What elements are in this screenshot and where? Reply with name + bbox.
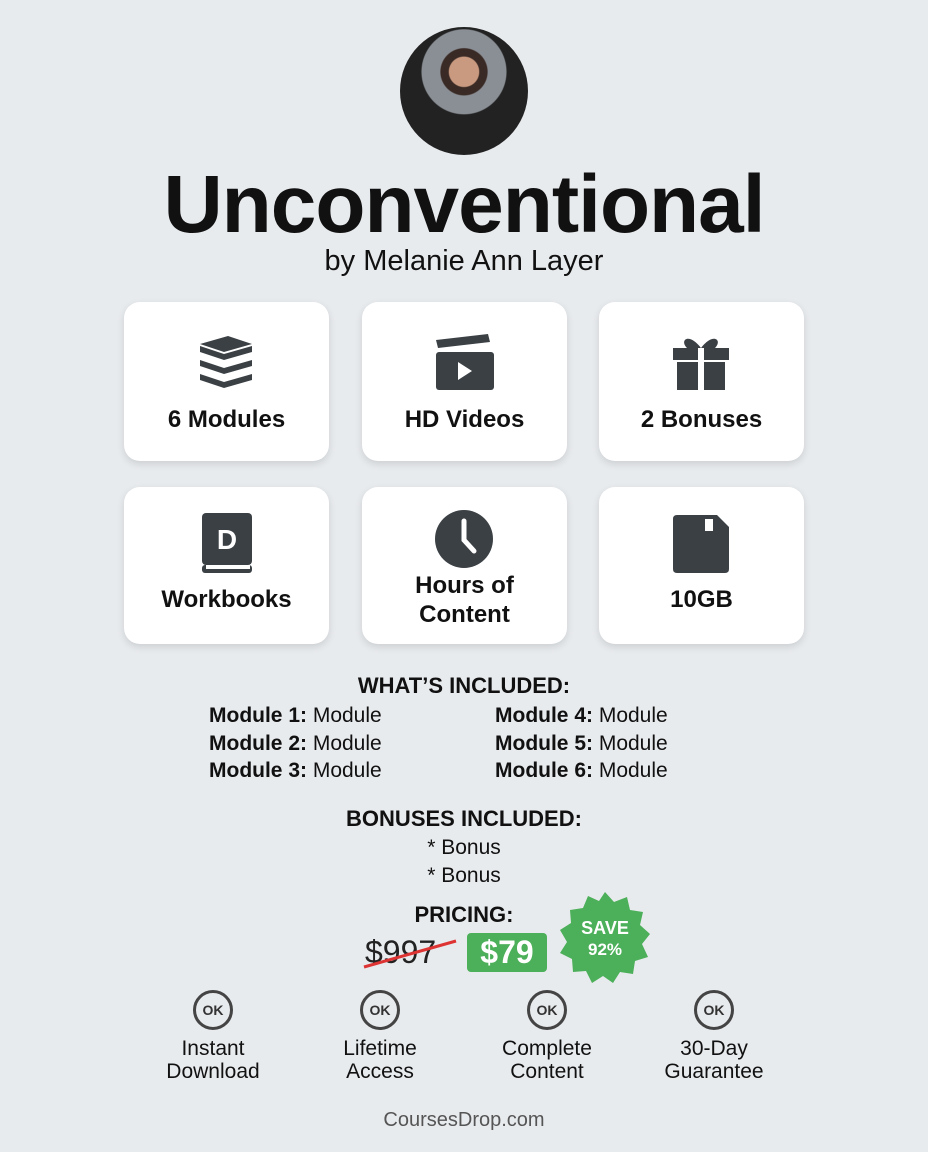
feature: lifetime access — [343, 990, 417, 1083]
card: bonuses: 2 Bonuses — [641, 406, 762, 433]
avatar — [400, 27, 528, 155]
module list left: Module 3: Module — [209, 759, 382, 782]
module list right — [495, 704, 668, 782]
heading: bonuses: BONUSES INCLUDED: — [346, 806, 582, 831]
feature: guarantee: OK — [704, 1002, 724, 1018]
badge: save 92%: 92% — [588, 940, 622, 959]
module list right: Module 6: Module — [495, 759, 668, 782]
feature: instant download: OK — [202, 1002, 224, 1018]
module list right: Module 5: Module — [495, 732, 668, 754]
feature: instant download — [166, 990, 260, 1083]
feature: guarantee: Guarantee — [664, 1060, 764, 1083]
card: hours — [362, 487, 567, 644]
feature: complete content — [502, 990, 592, 1083]
feature: guarantee — [664, 990, 764, 1083]
title: Unconventional — [163, 159, 765, 250]
old price: $997 — [365, 934, 436, 970]
card: workbooks: Workbooks — [161, 586, 292, 613]
badge: save 92% — [560, 892, 650, 983]
feature: complete content: Complete — [502, 1037, 592, 1060]
card: workbooks — [124, 487, 329, 644]
card: size: 10GB — [670, 586, 733, 613]
module list left: Module 1: Module — [209, 704, 382, 727]
badge: save 92%: SAVE — [581, 918, 629, 938]
feature: complete content: Content — [510, 1060, 584, 1083]
heading: what's included: WHAT’S INCLUDED: — [358, 673, 570, 698]
feature: instant download: Download — [166, 1060, 260, 1083]
subtitle: by Melanie Ann Layer — [325, 245, 603, 277]
feature: lifetime access: Access — [346, 1060, 414, 1083]
card: size — [599, 487, 804, 644]
feature: instant download: Instant — [181, 1037, 245, 1060]
feature: lifetime access: Lifetime — [343, 1037, 417, 1060]
feature: complete content: OK — [536, 1002, 558, 1018]
card: hours: Content — [419, 601, 510, 628]
bonus list: * Bonus — [427, 864, 501, 886]
heading: pricing: PRICING: — [414, 902, 514, 927]
card: videos — [362, 302, 567, 461]
feature: guarantee: 30-Day — [680, 1037, 748, 1060]
feature: lifetime access: OK — [370, 1002, 390, 1018]
footer: CoursesDrop.com — [383, 1109, 545, 1131]
card: modules: 6 Modules — [168, 406, 285, 433]
new price — [467, 933, 547, 972]
card: modules — [124, 302, 329, 461]
module list left — [209, 704, 382, 782]
new price: $79 — [480, 934, 534, 970]
bonus list — [427, 836, 501, 886]
card: workbooks: D — [217, 524, 237, 555]
card: bonuses — [599, 302, 804, 461]
bonus list: * Bonus — [427, 836, 501, 859]
module list right: Module 4: Module — [495, 704, 668, 727]
card: hours: Hours of — [415, 572, 514, 599]
card: videos: HD Videos — [405, 406, 524, 433]
module list left: Module 2: Module — [209, 732, 382, 754]
